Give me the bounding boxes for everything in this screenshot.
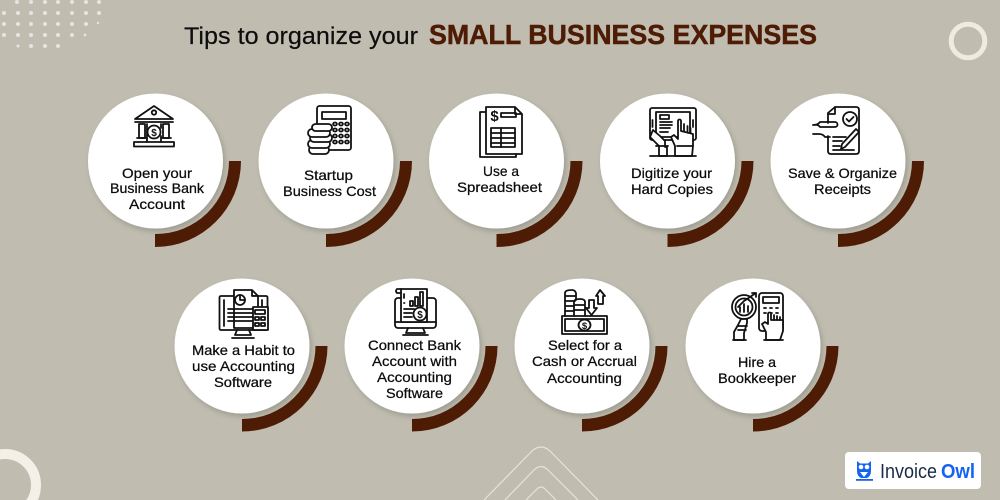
card: Startup Business Cost: Startup — [304, 167, 353, 183]
decorative ring top right — [951, 24, 985, 58]
card: Use a Spreadsheet: Use a — [483, 163, 519, 179]
card: Make a Habit to use Accounting Software: Software — [214, 374, 272, 390]
icon: owl — [856, 461, 873, 481]
card: Make a Habit to use Accounting Software — [174, 278, 328, 432]
card: Select for a Cash or Accrual Accounting: Cash or Accrual — [532, 353, 637, 369]
icon: spreadsheet — [480, 107, 522, 157]
card: Save & Organize Receipts: Save & Organize — [788, 165, 897, 181]
card: Use a Spreadsheet — [429, 94, 582, 247]
card: Select for a Cash or Accrual Accounting — [514, 278, 668, 432]
card: Connect Bank Account with Accounting Software — [344, 278, 498, 432]
card: Hire a Bookkeeper: Hire a — [738, 354, 776, 370]
icon: receipt with check and pen — [813, 107, 859, 154]
decorative dot grid — [2, 0, 101, 48]
card: Digitize your Hard Copies — [600, 94, 754, 247]
icon: cash, coins and arrows — [562, 290, 607, 334]
logo: Invoice Owl: Owl — [941, 461, 975, 483]
icon: monitor with report and calculator — [220, 290, 268, 338]
card: Hire a Bookkeeper: Bookkeeper — [718, 370, 796, 386]
decorative chevrons — [484, 447, 598, 500]
card: Digitize your Hard Copies: Hard Copies — [631, 181, 713, 197]
icon: calculator and coins — [308, 106, 351, 154]
icon: cash, coins and arrows: $ — [582, 321, 588, 332]
icon: magnifier and calculator with hands — [732, 293, 783, 340]
title: SMALL BUSINESS EXPENSES — [429, 19, 817, 50]
card: Open your Business Bank Account: Business Bank — [110, 180, 205, 196]
card: Startup Business Cost: Business Cost — [283, 183, 376, 199]
card: Open your Business Bank Account — [88, 94, 241, 247]
card: Select for a Cash or Accrual Accounting: Accounting — [547, 370, 622, 386]
decorative ring bottom left — [0, 454, 36, 500]
card: Digitize your Hard Copies: Digitize your — [631, 165, 712, 181]
icon: monitor with chart and dollar: $ — [417, 310, 423, 321]
logo: Invoice Owl — [845, 452, 981, 489]
card: Save & Organize Receipts — [770, 94, 924, 247]
card: Connect Bank Account with Accounting Software: Connect Bank — [368, 337, 462, 353]
card: Select for a Cash or Accrual Accounting: Select for a — [548, 337, 622, 353]
icon: bank: $ — [151, 128, 157, 139]
logo: Invoice Owl: Invoice — [880, 461, 937, 483]
card: Connect Bank Account with Accounting Software: Account with — [372, 353, 457, 369]
card: Open your Business Bank Account: Account — [129, 196, 185, 212]
title — [184, 19, 817, 50]
icon: bank — [134, 106, 174, 146]
card: Save & Organize Receipts: Receipts — [814, 181, 871, 197]
card: Startup Business Cost — [258, 94, 412, 247]
icon: spreadsheet: $ — [490, 108, 499, 125]
card: Hire a Bookkeeper — [686, 278, 838, 432]
card: Make a Habit to use Accounting Software: use Accounting — [192, 358, 295, 374]
card: Make a Habit to use Accounting Software: Make a Habit to — [192, 342, 295, 358]
card: Connect Bank Account with Accounting Software: Accounting — [377, 369, 452, 385]
card: Open your Business Bank Account: Open your — [122, 165, 192, 181]
icon: tablet with hands — [650, 108, 696, 156]
title: Tips to organize your — [184, 23, 418, 50]
card: Connect Bank Account with Accounting Software: Software — [386, 385, 443, 401]
card: Use a Spreadsheet: Spreadsheet — [457, 179, 542, 195]
icon: monitor with chart and dollar — [395, 289, 436, 335]
